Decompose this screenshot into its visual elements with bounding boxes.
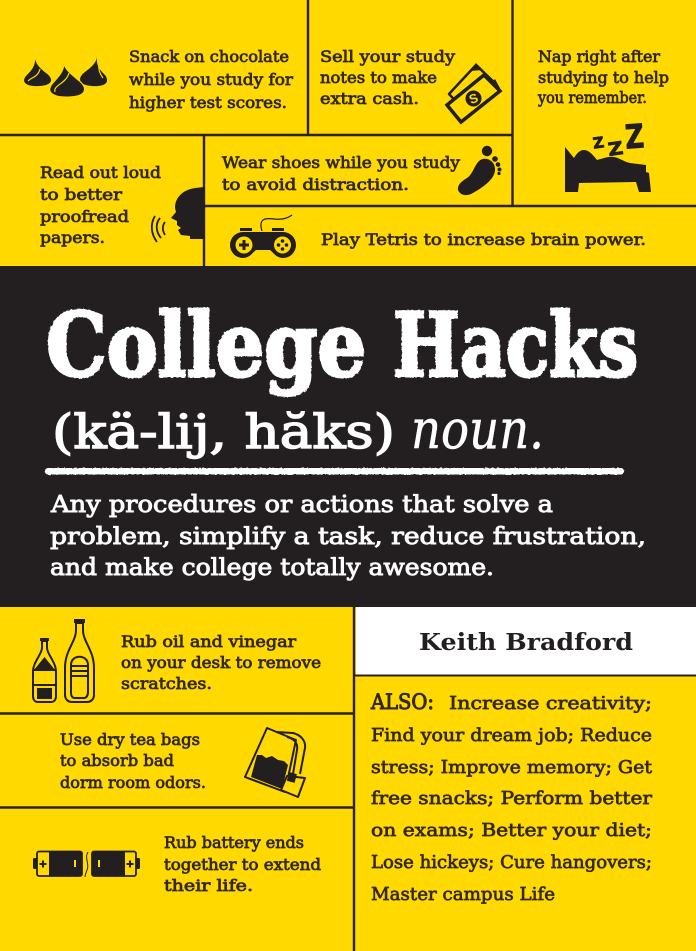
divider rule [45,468,624,474]
text: read out loud: Read out loud [40,163,161,182]
icon: tea bag [245,728,305,797]
text: nap: Nap right after [538,47,660,66]
text: batteries [164,833,321,895]
pronunciation: noun. [411,398,544,461]
definition text [50,490,646,581]
text: tetris: Play Tetris to increase brain power. [321,230,646,249]
panel: also list: free snacks; Perform better [371,788,652,809]
text: nap: you remember. [537,88,647,107]
panel: chocolate [24,47,293,112]
text: oil and vinegar [121,632,321,693]
icon: chocolate drops [24,57,107,97]
text: read out loud: to better [40,185,122,204]
definition text: Any procedures or actions that solve a [50,490,553,518]
panel: study notes [320,47,501,124]
author name: Keith Bradford [419,629,633,656]
text: study notes: Sell your study [320,47,455,66]
icon: batteries [33,852,140,877]
text: chocolate: while you study for [129,70,293,89]
icon: money: S [467,90,480,107]
title: Hacks [393,293,638,397]
panel: also list: Master campus Life [371,884,555,905]
panel: title definition [0,266,696,607]
panel: also list: Increase creativity; [449,693,652,714]
text: oil and vinegar: scratches. [121,674,212,693]
panel: tea bags [60,728,305,797]
panel grid lines top [0,0,696,266]
text: chocolate [129,47,293,112]
text: shoes [222,153,460,194]
text: nap: studying to help [538,68,669,87]
text: study notes: extra cash. [320,89,419,108]
text: tea bags: Use dry tea bags [60,730,200,749]
icon: speaking head [152,187,204,242]
icon: sleeping in bed: Z [624,116,645,157]
text: study notes [320,47,455,108]
dark band [0,266,696,607]
panel: read out loud [40,163,204,247]
panel: also list [370,690,653,905]
bottom grid lines [0,606,354,951]
panel: also list: stress; Improve memory; Get [371,757,653,778]
panel: also list: Lose hickeys; Cure hangovers; [371,852,652,873]
title [46,293,638,397]
text: batteries: Rub battery ends [164,833,304,852]
icon: sleeping in bed [565,116,651,192]
panel: batteries [33,833,321,895]
text: chocolate: higher test scores. [129,93,287,112]
author box rule [355,674,696,676]
text: tea bags: dorm room odors. [60,773,206,792]
panel: also list: Find your dream job; Reduce [371,725,652,746]
icon: money [445,63,501,124]
text: oil and vinegar: on your desk to remove [121,653,321,672]
white author box [356,607,696,675]
text: shoes: Wear shoes while you study [222,153,460,172]
icon: bottles [33,619,94,702]
definition text: and make college totally awesome. [50,553,494,581]
icon: sleeping in bed: Z [592,133,605,153]
text: chocolate: Snack on chocolate [129,47,289,66]
pronunciation: (kä-lij, hăks) [52,405,395,460]
panel: tetris [230,215,646,258]
panel: author [355,607,696,676]
text: shoes: to avoid distraction. [222,175,409,194]
panel: also list: on exams; Better your diet; [371,820,652,841]
panel: also list: ALSO: [370,690,434,714]
icon: game controller [230,215,296,258]
panel: oil and vinegar [33,619,321,702]
panel: top hacks [0,0,696,266]
title: College [46,293,366,397]
text: tea bags [60,730,206,792]
text: tea bags: to absorb bad [60,751,174,770]
definition text: problem, simplify a task, reduce frustration, [50,522,646,550]
text: read out loud: papers. [40,228,105,247]
panel: shoes [222,146,502,195]
icon: footprint [458,146,502,195]
text: batteries: together to extend [164,855,321,874]
text: read out loud: proofread [40,207,129,226]
pronunciation [52,398,544,461]
text: oil and vinegar: Rub oil and vinegar [121,632,296,651]
panel: nap [537,47,669,192]
text: batteries: their life. [164,876,253,895]
panel: bottom left hacks [0,606,354,951]
text: read out loud [40,163,161,247]
text: study notes: notes to make [320,68,437,87]
text: nap [537,47,669,107]
icon: sleeping in bed: Z [607,138,625,161]
